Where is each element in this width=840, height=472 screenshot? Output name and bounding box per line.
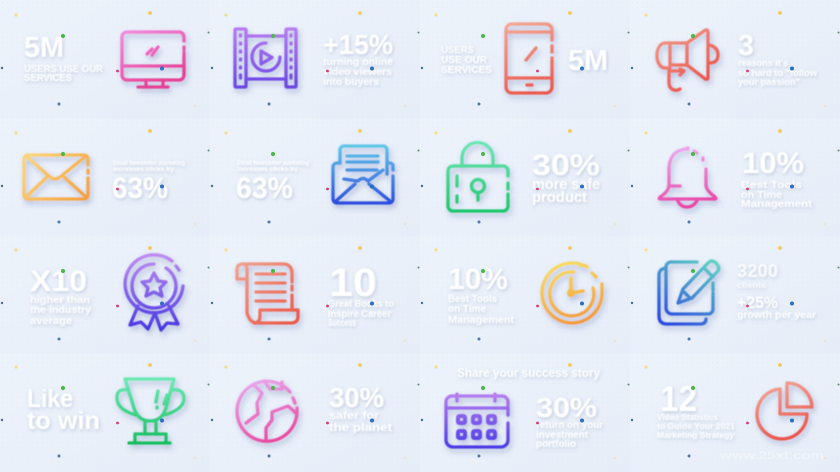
icon: globe: [237, 381, 297, 441]
text: 10%: Best Tools: [741, 179, 802, 191]
text: 3 reasons: your passion": [738, 77, 800, 88]
text: 5M users: USERS USE OUR: [24, 64, 104, 75]
text: 12: [657, 378, 736, 440]
icon: paper scroll: [237, 264, 298, 323]
text: 63%: [112, 161, 185, 205]
text: users: SERVICES: [441, 65, 492, 76]
watermark: www.25xt.com: [719, 450, 824, 462]
text: 63%: 63%: [236, 172, 293, 205]
text: 10%: Management: [741, 198, 813, 210]
text: 30%: product: [532, 189, 587, 206]
text: 10%: on Time: [448, 304, 486, 315]
text: 30%: investment: [536, 430, 589, 441]
text: 30%: more safe: [532, 176, 600, 193]
icon: open envelope: [333, 146, 393, 203]
text: 30%: return on your: [536, 420, 603, 431]
text: +15%: turning online: [323, 57, 393, 68]
text: users: USE OUR: [441, 55, 488, 66]
text: X10: X10: [30, 265, 87, 298]
text: 63%: Email Newsletter marketing: [237, 161, 309, 167]
panel: clock 10%: [448, 263, 602, 326]
panel: lock 30%: [448, 142, 600, 211]
text: 5M: 5M: [568, 45, 608, 77]
text: X10: average: [30, 315, 72, 327]
panel: megaphone 3: [657, 30, 818, 90]
panel: tablet 5M: [441, 24, 608, 93]
text: 5M users: 5M: [24, 32, 64, 64]
panel: monitor 5M: [24, 32, 184, 87]
text: +15%: +15%: [323, 29, 393, 60]
panel: badge X10: [30, 255, 183, 330]
text: 3200: growth per year: [737, 310, 816, 321]
icon: bell: [659, 148, 716, 207]
panel: open envelope 63%: [236, 146, 393, 205]
icon: envelope: [24, 155, 88, 199]
text: 10: 10: [329, 261, 377, 305]
text: users: [441, 45, 492, 76]
text: 10%: 10%: [448, 263, 508, 296]
text: 12: 12: [660, 378, 697, 419]
text: 12: to Guide Your 2021: [657, 422, 736, 431]
panel: scroll 10: [237, 261, 394, 329]
text: 63%: increases clicks by: [237, 167, 299, 173]
icon: padlock: [448, 142, 508, 211]
text: 10: [328, 261, 394, 329]
text: X10: the industry: [30, 304, 91, 316]
text: 10%: [448, 263, 515, 326]
text: 3200: +25%: [737, 293, 778, 312]
icon: tablet: [506, 24, 552, 93]
text: 3200: clients: [737, 281, 767, 290]
text: 30%: the planet: [329, 422, 392, 434]
text: +15%: video viewers: [323, 67, 392, 78]
text: users: USERS: [441, 45, 474, 56]
icon: award badge: [125, 255, 183, 330]
text: 10%: Best Tools: [448, 294, 497, 305]
panel: trophy like to win: [27, 379, 184, 443]
text: like to win: [27, 385, 100, 435]
panel: bell 10%: [659, 147, 813, 210]
panel: globe 30%: [237, 381, 392, 441]
text: 3200: [737, 261, 816, 321]
text: 30%: [329, 382, 392, 434]
text: like to win: Like: [27, 385, 73, 413]
text: 10: Success: [328, 318, 356, 329]
icon: trophy: [117, 379, 184, 443]
text: 3 reasons: reasons it's: [738, 58, 788, 69]
text: 10%: 10%: [742, 147, 804, 180]
text: 63%: Email Newsletter marketing: [113, 161, 185, 167]
text: 3 reasons: so hard to "follow: [738, 68, 818, 79]
text: +15%: into buyers: [323, 77, 379, 88]
text: 5M users: [24, 32, 104, 84]
text: 63%: increases clicks by: [113, 167, 175, 173]
heading: share your success story: Share your success story: [457, 365, 601, 380]
icon: film strip: [235, 29, 296, 87]
icon: monitor: [122, 32, 184, 87]
panel: pie chart 12: [657, 378, 812, 440]
text: 3 reasons: 3: [738, 30, 754, 62]
text: 10%: [741, 147, 813, 210]
text: 10: Inspire Career: [328, 309, 391, 320]
text: 10%: Management: [448, 315, 515, 326]
text: 63%: [236, 161, 309, 205]
icon: notepad and pencil: [659, 261, 719, 324]
icon: clock: [542, 263, 602, 323]
panel: film +15%: [235, 29, 393, 88]
text: 30%: 30%: [536, 392, 597, 423]
text: +15%: [323, 29, 393, 88]
text: 12: Marketing Strategy: [657, 431, 735, 440]
text: 12: Video Statistics: [657, 413, 719, 422]
text: 30%: safer for: [329, 410, 380, 422]
text: 10: Great Books to: [328, 299, 394, 310]
text: X10: [30, 265, 91, 327]
text: 30%: portfolio: [536, 439, 576, 450]
panel: notepad 3200: [659, 261, 816, 324]
text: 3200: 3200: [737, 261, 778, 281]
text: 63%: 63%: [112, 172, 168, 205]
text: 30%: 30%: [532, 149, 600, 182]
text: 5M users: SERVICES: [24, 73, 72, 84]
text: like to win: to win: [27, 407, 100, 435]
icon: calendar: [446, 394, 508, 447]
text: 10%: on Time: [741, 189, 782, 201]
text: 30%: [532, 149, 600, 206]
text: 30%: [536, 392, 603, 450]
panel: calendar 30%: [446, 365, 603, 450]
icon: pie chart: [757, 383, 812, 439]
text: X10: higher than: [30, 294, 90, 306]
text: 30%: 30%: [329, 382, 384, 413]
text: 3 reasons: [738, 30, 818, 88]
icon: megaphone: [657, 30, 718, 90]
panel: envelope 63%: [24, 155, 185, 205]
